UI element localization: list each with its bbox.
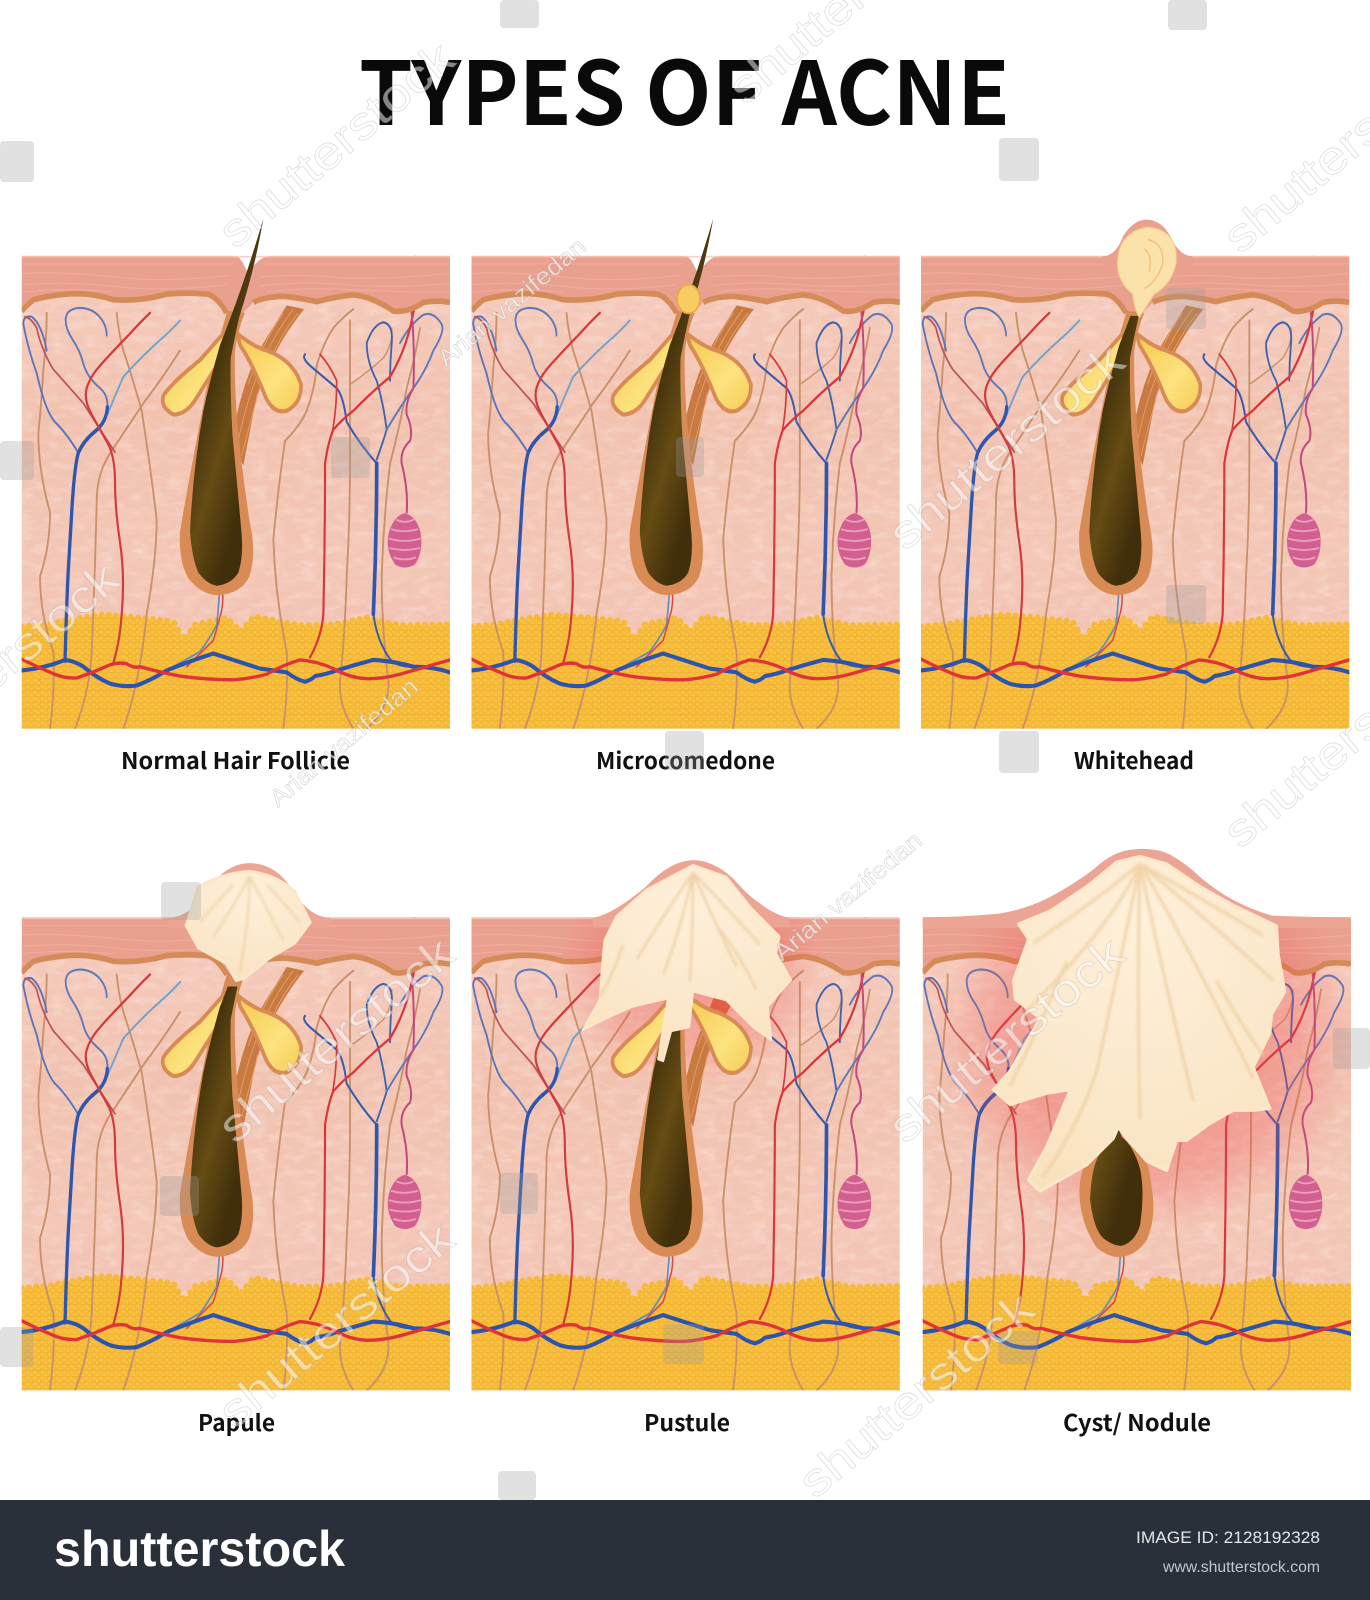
arrector muscle inflamed top (708, 990, 733, 1020)
footer logo: shutterstock (54, 1521, 345, 1577)
panel: cyst nodule (923, 843, 1360, 1390)
sebum plug (677, 285, 700, 313)
label: cyst nodule: Cyst/ Nodule (1063, 1404, 1211, 1438)
short hair shaft (1089, 316, 1142, 586)
label: pustule: Pustule (644, 1404, 730, 1438)
hair stub (1090, 1127, 1143, 1246)
skin cross-section (472, 917, 900, 1390)
watermark: stock overlay: shutterstock (788, 1281, 1044, 1508)
bump of skin (923, 849, 1351, 928)
hair follicle sheath (180, 305, 304, 595)
label: whitehead: Whitehead (1074, 742, 1194, 776)
watermark: stock overlay: shutterstock (208, 31, 464, 258)
hair follicle sheath (1079, 305, 1203, 595)
watermark: stock overlay: shutterstock (878, 926, 1134, 1153)
panel: normal hair follicle (22, 219, 450, 729)
inflammation glow (570, 918, 812, 1073)
panel: microcomedone (472, 219, 900, 729)
watermark: stock overlay: Arian vazifedan (265, 673, 424, 813)
image id: IMAGE ID: 2128192328 (1136, 1528, 1320, 1547)
broken hair shaft (640, 1030, 692, 1248)
title: TYPES OF ACNE (359, 24, 1010, 151)
label: normal hair follicle: Normal Hair Follicle (121, 742, 350, 776)
cyst mass (993, 856, 1285, 1191)
hair shaft (190, 219, 263, 586)
sebaceous glands (163, 988, 301, 1076)
hair shaft (640, 219, 713, 586)
bump of skin (1103, 220, 1193, 266)
skin cross-section (22, 917, 450, 1390)
panel: papule (22, 863, 450, 1390)
skin cross-section (921, 256, 1349, 729)
watermark: stock overlay: shutterstock (878, 333, 1134, 560)
bump of skin (168, 863, 331, 927)
hair follicle sheath (180, 967, 304, 1257)
pustule mass (583, 865, 791, 1061)
hair follicle sheath (630, 305, 754, 595)
watermark: stock overlay: shutterstock (208, 1211, 464, 1438)
label: papule: Papule (198, 1404, 275, 1438)
hair follicle sheath (630, 967, 754, 1257)
watermark: stock overlay: Arian vazifedan (433, 233, 592, 373)
sebaceous glands (1062, 326, 1200, 415)
short hair shaft (190, 986, 242, 1248)
skin cross-section (472, 256, 900, 729)
website: www.shutterstock.com (1162, 1559, 1320, 1576)
inflammation glow (948, 928, 1343, 1220)
bump of skin (593, 860, 789, 927)
sebaceous glands (612, 326, 751, 415)
papule mass (186, 871, 310, 981)
panel: whitehead (921, 219, 1349, 729)
watermark: stock overlay: shutterstock (208, 926, 464, 1153)
skin cross-section (923, 917, 1351, 1390)
panel: pustule (472, 858, 900, 1390)
hair follicle sheath remnant (1079, 1139, 1153, 1257)
watermark: stock overlay: Arian vazifedan (769, 827, 928, 967)
sebaceous glands (163, 326, 301, 415)
label: microcomedone: Microcomedone (596, 742, 775, 776)
skin cross-section (22, 256, 450, 729)
whitehead plug (1118, 227, 1176, 317)
footer bar (0, 1500, 1370, 1600)
sebaceous glands (612, 988, 751, 1076)
